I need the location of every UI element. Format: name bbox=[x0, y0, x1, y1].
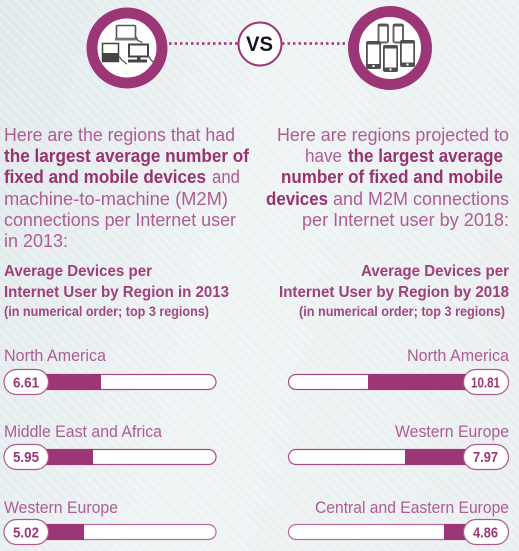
text block: 2013 intro: and bbox=[212, 166, 240, 187]
heading: 2018 chart bbox=[279, 263, 509, 319]
text block: 2018 intro bbox=[266, 124, 509, 230]
bar: North America 2018: North America bbox=[407, 346, 510, 365]
text block: 2013 intro: the largest average number of bbox=[4, 145, 250, 166]
heading: 2013 chart: Internet User by Region in 2013 bbox=[4, 284, 229, 301]
text block: 2018 intro: devices bbox=[266, 188, 328, 209]
bar: Western Europe 2018 bbox=[288, 422, 509, 470]
text block: 2018 intro: per Internet user by 2018: bbox=[302, 209, 509, 230]
bar: Western Europe 2018: Western Europe bbox=[395, 422, 509, 441]
icon: mobile devices bbox=[354, 12, 426, 84]
bar: Western Europe 2013: 5.02 bbox=[13, 524, 39, 542]
bar: Middle East and Africa 2013 bbox=[4, 422, 216, 470]
heading: 2018 chart: Internet User by Region by 2018 bbox=[279, 284, 509, 301]
bar: Western Europe 2013: Western Europe bbox=[4, 498, 118, 517]
bar: Middle East and Africa 2013: Middle East and Africa bbox=[4, 422, 162, 441]
heading: 2018 chart: (in numerical order; top 3 regions) bbox=[299, 304, 505, 319]
VS badge: VS bbox=[246, 33, 273, 56]
bar: North America 2013: 6.61 bbox=[13, 374, 39, 392]
icon: laptop top bbox=[115, 26, 142, 43]
text block: 2013 intro: Here are the regions that had bbox=[4, 124, 235, 145]
text block: 2018 intro: number of fixed and mobile bbox=[281, 166, 503, 187]
icon: phone left bbox=[366, 41, 381, 69]
icon: phone top right bbox=[393, 24, 404, 42]
heading: 2013 chart bbox=[4, 263, 229, 319]
icon: networked computers bbox=[92, 13, 162, 83]
text block: 2013 intro: fixed and mobile devices bbox=[4, 166, 206, 187]
text block: 2013 intro bbox=[4, 124, 250, 251]
dotted connector left bbox=[169, 42, 238, 45]
icon: phone right bbox=[400, 40, 415, 67]
heading: 2013 chart: Average Devices per bbox=[4, 263, 152, 280]
bar: Western Europe 2018: 7.97 bbox=[473, 449, 498, 466]
bar: North America 2018: 10.81 bbox=[471, 374, 500, 392]
text block: 2018 intro: the largest average bbox=[348, 145, 503, 166]
text block: 2018 intro: have bbox=[305, 145, 342, 166]
icon: phone top left bbox=[378, 24, 388, 42]
dotted connector right bbox=[282, 42, 350, 45]
bar: Central and Eastern Europe 2018 bbox=[288, 498, 509, 544]
text block: 2018 intro: and M2M connections bbox=[333, 188, 509, 209]
text block: 2013 intro: in 2013: bbox=[4, 230, 68, 251]
bar: North America 2013 bbox=[4, 346, 216, 394]
icon: phone centre bbox=[382, 44, 399, 73]
text block: 2013 intro: connections per Internet user bbox=[4, 209, 236, 230]
bar: Western Europe 2013 bbox=[4, 498, 216, 544]
icon: desktop monitor bbox=[128, 44, 154, 63]
heading: 2018 chart: Average Devices per bbox=[361, 263, 509, 280]
heading: 2013 chart: (in numerical order; top 3 regions) bbox=[4, 304, 209, 319]
bar: North America 2013: North America bbox=[4, 346, 107, 365]
text block: 2018 intro: Here are regions projected to bbox=[277, 124, 509, 145]
text block: 2013 intro: machine-to-machine (M2M) bbox=[4, 188, 228, 209]
bar: Middle East and Africa 2013: 5.95 bbox=[13, 449, 39, 466]
VS badge bbox=[238, 22, 282, 66]
bar: Central and Eastern Europe 2018: 4.86 bbox=[473, 524, 498, 542]
icon: laptop lower left bbox=[102, 44, 127, 64]
bar: North America 2018 bbox=[288, 346, 510, 394]
